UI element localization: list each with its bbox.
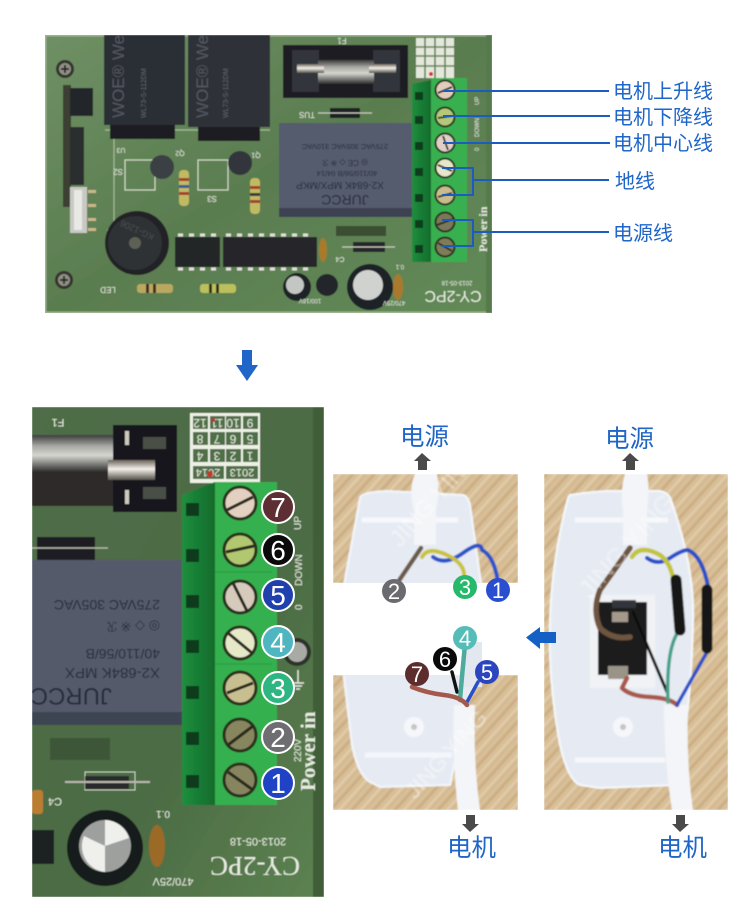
date code grid: 6 — [229, 432, 236, 446]
label: ground wire: 地线 — [615, 170, 655, 193]
date code grid: 12 — [193, 416, 207, 430]
panel: open switch bottom half photo: JING YING — [400, 705, 492, 803]
arrow: down, left — [462, 815, 479, 832]
panel: open switch top half photo: JING YING — [384, 445, 484, 552]
badge 7 — [262, 491, 294, 523]
label: motor down wire: 电机下降线 — [613, 106, 713, 129]
badge 5 — [475, 660, 499, 685]
label: motor up wire: 电机上升线 — [613, 80, 713, 103]
buzzer: KG-1206 — [119, 218, 155, 242]
badge 4: 4 — [270, 627, 286, 658]
badge 5 — [262, 579, 294, 611]
switches, transistors and silkscreen — [113, 146, 261, 203]
terminal block — [182, 482, 277, 805]
relays — [104, 35, 270, 142]
arrow: down — [236, 350, 258, 381]
date code grid: 3 — [213, 449, 220, 463]
badge 5: 5 — [481, 660, 493, 685]
badge 7: 7 — [270, 492, 286, 523]
fuse holder with fuse — [32, 416, 177, 512]
buzzer — [105, 211, 169, 275]
label: motor, left: 电机 — [447, 834, 496, 862]
panel: top circuit board photo — [45, 5, 492, 313]
terminal screws — [436, 80, 454, 256]
date code grid: 8 — [196, 432, 203, 446]
chips — [175, 235, 317, 269]
electrolytic capacitor — [67, 810, 143, 886]
number badges on terminal block — [262, 491, 294, 799]
relays: WL73-S-112DM — [141, 68, 148, 118]
silkscreen text: UP — [293, 516, 304, 530]
date code grid: 5 — [246, 432, 253, 446]
badge 3: 3 — [459, 575, 471, 600]
X2 capacitor — [279, 123, 415, 217]
fuse holder with fuse: F1 — [337, 36, 347, 45]
board silkscreen text: 2013-05-18 — [441, 279, 472, 285]
badge 7 — [405, 662, 429, 687]
board silkscreen text — [100, 97, 490, 305]
callout lines: terminals to labels — [442, 91, 610, 246]
resistors — [137, 170, 260, 293]
fuse holder with fuse: F1 — [52, 416, 64, 428]
panel: assembled switch photo: JING YING — [572, 488, 681, 604]
X2 capacitor: JURCC — [321, 192, 369, 208]
board silkscreen text: DOWN — [475, 118, 481, 137]
badge 4 — [453, 626, 477, 651]
board silkscreen text: 470/25V — [383, 299, 405, 305]
board silkscreen text: Power in — [476, 206, 490, 252]
panel: assembled switch photo — [544, 474, 728, 810]
panel: open switch bottom half photo — [333, 626, 518, 810]
badge 6: 6 — [439, 647, 451, 672]
terminal screws — [224, 487, 256, 796]
terminal block — [412, 78, 467, 262]
date code grid: 9 — [246, 416, 253, 430]
wires — [396, 546, 498, 585]
board silkscreen text: LED — [100, 285, 116, 294]
badge 1: 1 — [492, 578, 504, 603]
switches, transistors and silkscreen: Q1 — [251, 151, 261, 158]
board silkscreen text: C4 — [335, 255, 344, 262]
badge 6 — [262, 534, 294, 566]
left connector — [63, 85, 96, 233]
X2 capacitor: ◎ CE ◇ ※ ℛ — [321, 158, 368, 167]
badge 3 — [262, 672, 294, 704]
wires — [412, 645, 478, 705]
badge 1: 1 — [270, 768, 286, 799]
fuse holder with fuse — [283, 36, 408, 98]
board silkscreen text: 0.1 — [395, 263, 404, 269]
mounting screws — [55, 60, 74, 289]
panel: open switch top half photo — [333, 474, 518, 583]
badge 2 — [262, 721, 294, 753]
board silkscreen text: UP — [475, 97, 481, 105]
badge 4 — [262, 626, 294, 658]
label: power wire: 电源线 — [613, 222, 673, 245]
switches, transistors and silkscreen: Q2 — [175, 149, 185, 156]
diodes — [299, 108, 395, 252]
date code grid: 2013 — [230, 466, 254, 478]
X2 capacitor: X2-684K MPX/MKP — [296, 179, 384, 190]
panel: enlarged terminal block photo — [31, 407, 324, 897]
relays: WL73-S-112DM — [223, 68, 230, 118]
relays: WOE® Weiglei — [193, 5, 212, 118]
silkscreen text — [48, 516, 320, 887]
label: power source, right: 电源 — [605, 425, 654, 453]
date code grid: 10 — [226, 416, 240, 430]
silkscreen text: DOWN — [294, 554, 305, 586]
X2 capacitor: X2-684K MPX — [65, 664, 160, 681]
switches, transistors and silkscreen: S2 — [113, 167, 123, 176]
badge 6 — [433, 647, 457, 672]
lower diodes — [50, 738, 150, 790]
date code grid: 4 — [196, 449, 203, 463]
label: power source, left: 电源 — [400, 423, 449, 451]
date code grid: 2014 — [196, 466, 220, 478]
badge 3: 3 — [270, 673, 286, 704]
relays: WOE® Weiglei — [109, 5, 128, 118]
board screw — [283, 638, 311, 666]
arrow: up, right — [622, 453, 639, 470]
badges: wires 2, 3, 1 — [382, 575, 510, 604]
silkscreen text: 2013-05-18 — [230, 835, 286, 847]
date code grid: 2 — [229, 449, 236, 463]
badge 2: 2 — [270, 722, 286, 753]
diodes: TUS — [299, 110, 315, 119]
X2 capacitor: 275VAC 305VAC 310VAC — [301, 142, 388, 151]
date code grid: 1 — [246, 449, 253, 463]
badge 6: 6 — [270, 535, 286, 566]
diode — [32, 537, 108, 560]
X2 capacitor — [31, 560, 187, 725]
silkscreen text: 0.1 — [156, 808, 170, 819]
X2 capacitor: ◎ ◇ ※ ℛ — [107, 619, 160, 634]
badge 5: 5 — [270, 580, 286, 611]
badge 7: 7 — [411, 662, 423, 687]
board silkscreen text: 100/16V — [299, 297, 321, 303]
X2 capacitor: 40/110/56/B — [86, 646, 160, 662]
silkscreen text: Power in — [296, 711, 320, 791]
silkscreen text: 0 — [294, 604, 305, 610]
date code grid: 11 — [210, 416, 223, 430]
arrow: up, left — [414, 453, 431, 470]
date code grid — [190, 413, 260, 483]
X2 capacitor: 275VAC 305VAC — [54, 597, 160, 613]
silkscreen text: C4 — [48, 795, 62, 807]
board silkscreen text: 0 — [475, 147, 481, 151]
label: motor, right: 电机 — [658, 834, 707, 862]
rocker switch — [598, 600, 647, 679]
switches, transistors and silkscreen: S3 — [207, 194, 217, 203]
arrow: left, blue — [526, 627, 556, 649]
small parts — [32, 790, 165, 867]
wires — [596, 548, 708, 705]
silkscreen text: CY-2PC — [210, 851, 300, 881]
arrow: down, right — [672, 815, 689, 832]
X2 capacitor: JURCC — [31, 682, 112, 709]
badge 4: 4 — [459, 626, 471, 651]
badge 2: 2 — [388, 579, 400, 604]
board silkscreen text: CY-2PC — [424, 287, 482, 304]
date code grid: 7 — [213, 432, 220, 446]
label: motor centre wire: 电机中心线 — [613, 132, 713, 155]
small capacitors and transistor — [283, 238, 403, 310]
silkscreen text: 220V — [293, 738, 304, 762]
switches, transistors and silkscreen: U3 — [116, 146, 125, 153]
date code grid — [416, 38, 454, 78]
badge 1 — [262, 767, 294, 799]
silkscreen text: 470/25V — [152, 875, 193, 887]
X2 capacitor: 40/110/56/B 04/14 — [317, 169, 377, 178]
